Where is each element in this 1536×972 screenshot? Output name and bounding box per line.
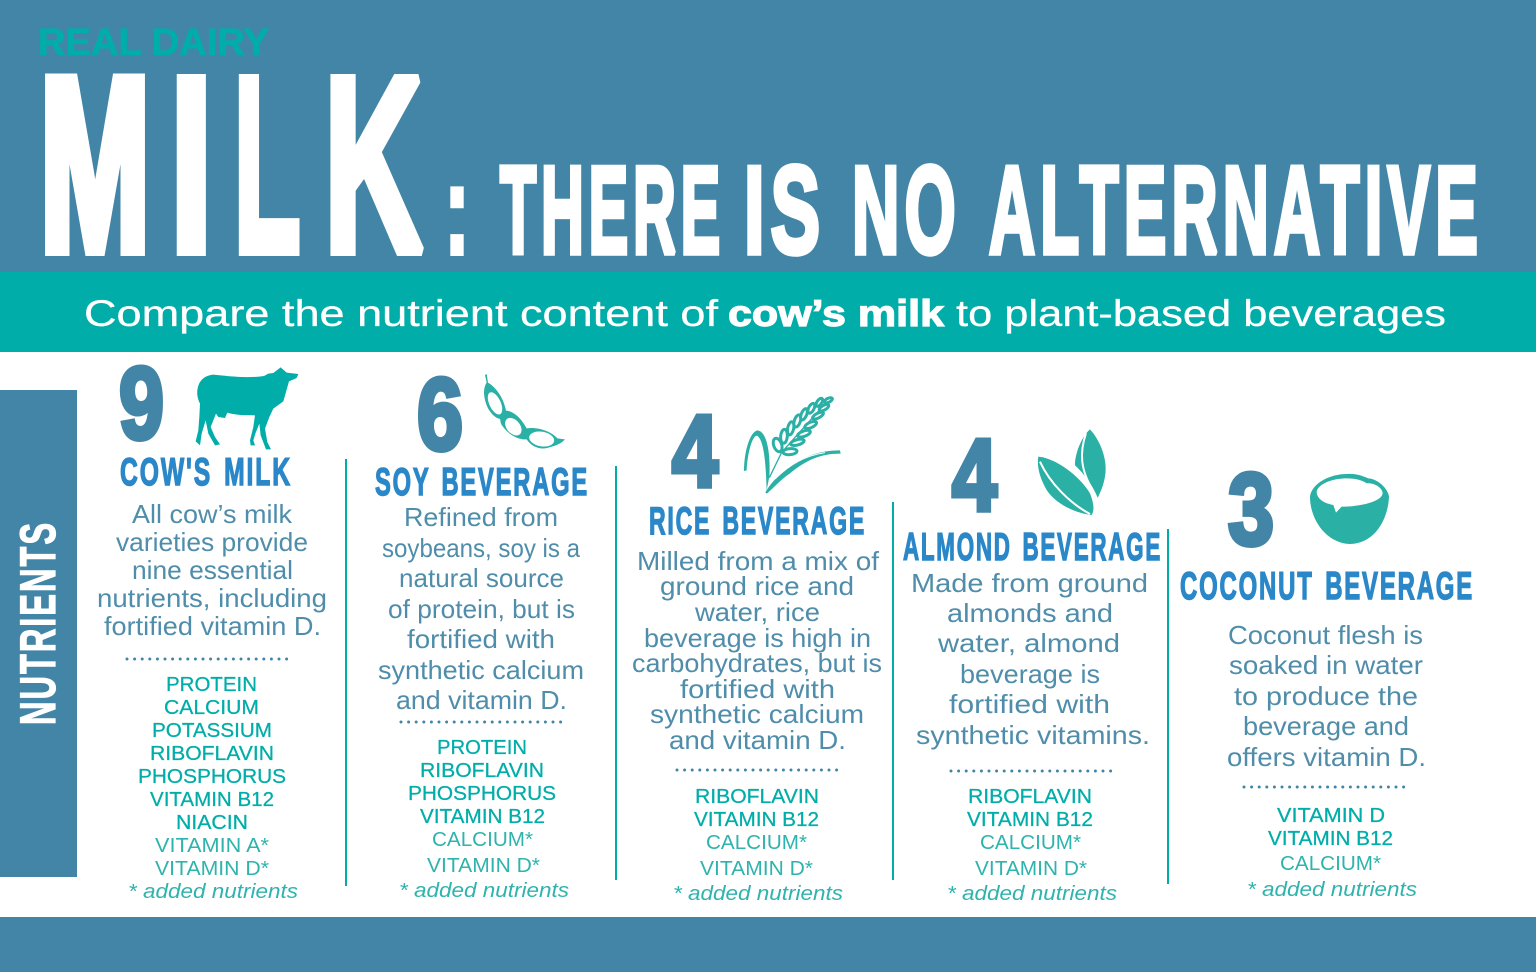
title tagline: [500, 142, 1483, 280]
description: beverage is: [960, 659, 1100, 689]
dotted separator: [127, 658, 287, 660]
panel: coconut beverage: [1180, 452, 1474, 901]
description: varieties provide: [116, 527, 308, 557]
nutrient list: [399, 737, 569, 902]
description: soybeans, soy is a: [382, 533, 580, 563]
nutrient list: [947, 786, 1117, 905]
description: offers vitamin D.: [1227, 742, 1426, 772]
icon: cow: [196, 367, 298, 449]
nutrient list: CALCIUM: [164, 697, 259, 719]
count 3: 3: [1228, 452, 1274, 566]
description: water, almond: [937, 628, 1120, 658]
dotted separator: [401, 720, 561, 724]
description: beverage is high in: [644, 623, 871, 653]
nutrient list: [128, 674, 298, 903]
icon: soybean pod: [484, 374, 565, 448]
nutrient list: NIACIN: [176, 812, 248, 834]
header band: [0, 0, 1536, 272]
description: ground rice and: [660, 571, 854, 601]
nutrient list: PHOSPHORUS: [408, 783, 556, 805]
nutrient list: * added nutrients: [673, 883, 843, 905]
description: [911, 568, 1150, 750]
subtitle text: to plant-based beverages: [956, 293, 1446, 334]
description: Refined from: [404, 502, 558, 532]
heading: ALMOND BEVERAGE: [903, 526, 1162, 569]
nutrient list: CALCIUM*: [1280, 853, 1381, 875]
title word: milk: I: [169, 25, 213, 304]
count 9: 9: [119, 346, 164, 460]
nutrient list: VITAMIN D*: [155, 858, 269, 880]
title tagline: NO: [852, 142, 961, 280]
description: beverage and: [1243, 711, 1409, 741]
icon: coconut: [1310, 474, 1389, 544]
nutrient list: VITAMIN B12: [1268, 828, 1393, 850]
nutrient list: VITAMIN D*: [975, 858, 1087, 880]
description: synthetic calcium: [650, 699, 864, 729]
nutrient list: CALCIUM*: [980, 832, 1081, 854]
description: fortified with: [680, 674, 835, 704]
description: nine essential: [132, 555, 293, 585]
description: carbohydrates, but is: [632, 648, 882, 678]
nutrient list: PROTEIN: [437, 737, 527, 759]
nutrient list: * added nutrients: [128, 881, 298, 903]
count 4: 4: [672, 394, 718, 508]
subtitle band: [0, 272, 1536, 352]
description: nutrients, including: [97, 583, 327, 613]
count 4: 4: [952, 418, 997, 532]
description: All cow’s milk: [132, 499, 293, 529]
nutrient list: * added nutrients: [1247, 879, 1417, 901]
title tagline: THERE: [500, 142, 725, 280]
description: [97, 499, 327, 641]
column dividers: [346, 459, 1168, 886]
title colon: :: [444, 136, 470, 282]
nutrient list: CALCIUM*: [706, 832, 807, 854]
nutrient list: PHOSPHORUS: [138, 766, 286, 788]
nutrient list: [673, 786, 843, 905]
heading: RICE BEVERAGE: [649, 500, 866, 543]
description: natural source: [399, 563, 564, 593]
description: fortified vitamin D.: [104, 611, 321, 641]
panel: almond beverage: [903, 418, 1162, 905]
description: synthetic vitamins.: [916, 720, 1150, 750]
icon: almonds: [1038, 429, 1106, 515]
heading: SOY BEVERAGE: [375, 461, 589, 504]
nutrient list: VITAMIN D*: [700, 858, 813, 880]
description: soaked in water: [1229, 650, 1423, 680]
nutrient list: VITAMIN B12: [967, 809, 1093, 831]
side label: nutrients: [0, 390, 77, 877]
icon: rice stalk: [744, 397, 841, 494]
nutrient list: VITAMIN A*: [155, 835, 269, 857]
nutrient list: RIBOFLAVIN: [968, 786, 1092, 808]
description: almonds and: [947, 598, 1113, 628]
nutrient list: PROTEIN: [166, 674, 257, 696]
panel: soy beverage: [375, 358, 589, 902]
dotted separator: [951, 770, 1111, 772]
description: of protein, but is: [388, 594, 575, 624]
nutrient list: VITAMIN D: [1277, 805, 1385, 827]
panel: cow's milk: [97, 346, 327, 903]
nutrient list: * added nutrients: [947, 883, 1117, 905]
title word: milk: M: [40, 27, 150, 301]
description: and vitamin D.: [396, 685, 567, 715]
description: fortified with: [949, 689, 1110, 719]
nutrient list: RIBOFLAVIN: [420, 760, 544, 782]
heading: COW'S MILK: [120, 451, 292, 494]
title word: milk: L: [234, 25, 301, 304]
description: [1227, 620, 1426, 772]
count 6: 6: [417, 358, 463, 472]
dotted separator: [677, 768, 837, 772]
nutrient list: VITAMIN B12: [150, 789, 274, 811]
panel: rice beverage: [632, 394, 882, 905]
bottom band: [0, 917, 1536, 972]
title: [40, 25, 1483, 304]
description: water, rice: [694, 597, 820, 627]
description: Milled from a mix of: [637, 546, 880, 576]
subtitle text: Compare the nutrient content of: [84, 293, 719, 334]
description: and vitamin D.: [669, 725, 846, 755]
description: [632, 546, 882, 755]
description: [378, 502, 584, 715]
description: fortified with: [407, 624, 555, 654]
subtitle text: [84, 293, 1446, 334]
nutrient list: POTASSIUM: [152, 720, 272, 742]
nutrient list: * added nutrients: [399, 880, 569, 902]
side label: nutrients: NUTRIENTS: [10, 521, 66, 725]
nutrient list: RIBOFLAVIN: [150, 743, 274, 765]
nutrient list: CALCIUM*: [432, 829, 533, 851]
description: Made from ground: [911, 568, 1148, 598]
nutrient list: [1247, 805, 1417, 901]
title word: milk: [40, 25, 423, 304]
nutrient list: VITAMIN D*: [427, 855, 540, 877]
description: Coconut flesh is: [1228, 620, 1423, 650]
title tagline: IS: [744, 142, 826, 280]
eyebrow: real dairy: REAL DAIRY: [38, 22, 269, 64]
dotted separator: [1244, 786, 1404, 788]
nutrient list: VITAMIN B12: [694, 809, 819, 831]
description: synthetic calcium: [378, 655, 584, 685]
subtitle text: cow’s milk: [728, 293, 944, 334]
nutrient list: RIBOFLAVIN: [695, 786, 819, 808]
description: to produce the: [1234, 681, 1418, 711]
nutrient list: VITAMIN B12: [420, 806, 545, 828]
title word: milk: K: [324, 25, 423, 304]
